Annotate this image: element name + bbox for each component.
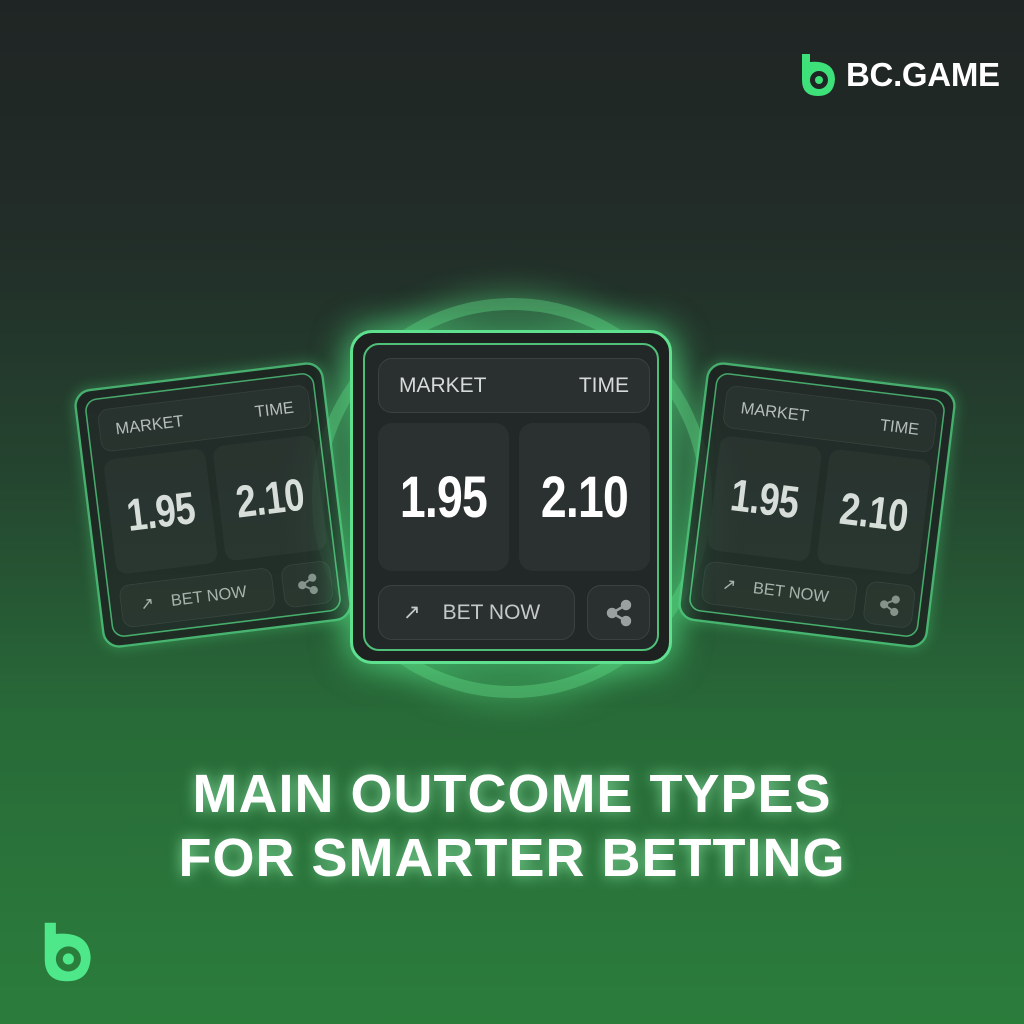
bet now button: ↗ xyxy=(403,601,421,624)
header: MARKET xyxy=(399,374,487,396)
odds 2.10: 2.10 xyxy=(541,464,628,530)
odds 2.10: 2.10 xyxy=(837,483,911,541)
odds 2.10 xyxy=(519,423,650,571)
odds 1.95: 1.95 xyxy=(728,469,802,528)
odds 2.10: 2.10 xyxy=(233,469,307,527)
header: MARKET xyxy=(740,399,810,425)
header xyxy=(97,384,313,453)
odds 1.95 xyxy=(103,448,218,575)
logo: BC.GAME xyxy=(802,54,1000,96)
card: right xyxy=(676,360,958,650)
bet now button: ↗ xyxy=(721,575,737,595)
title: MAIN OUTCOME TYPES xyxy=(192,764,832,824)
title xyxy=(174,764,849,888)
card: left xyxy=(72,360,354,650)
bet now button xyxy=(700,560,858,622)
logo mark bottom-left xyxy=(44,922,91,982)
title: FOR SMARTER BETTING xyxy=(178,828,845,888)
logo: BC.GAME: BC.GAME xyxy=(846,56,1000,93)
header xyxy=(378,358,650,413)
header: TIME xyxy=(254,398,295,421)
card: center xyxy=(350,330,672,664)
bet now button xyxy=(118,567,276,628)
odds 2.10 xyxy=(816,448,932,576)
glow ring xyxy=(312,298,712,698)
header xyxy=(722,385,938,453)
bet now button: BET NOW xyxy=(752,579,830,606)
bet now button: BET NOW xyxy=(443,600,540,624)
share icon xyxy=(862,580,916,629)
bet now button: BET NOW xyxy=(170,582,248,609)
odds 2.10 xyxy=(212,434,328,562)
odds 1.95 xyxy=(707,435,822,562)
header: TIME xyxy=(579,374,629,396)
bet now button xyxy=(378,585,575,640)
odds 1.95: 1.95 xyxy=(124,482,198,541)
bet now button: ↗ xyxy=(139,594,155,614)
share icon xyxy=(280,560,334,608)
header: TIME xyxy=(879,416,920,438)
share icon xyxy=(587,585,650,640)
header: MARKET xyxy=(115,412,184,438)
odds 1.95: 1.95 xyxy=(400,464,487,530)
odds 1.95 xyxy=(378,423,509,571)
